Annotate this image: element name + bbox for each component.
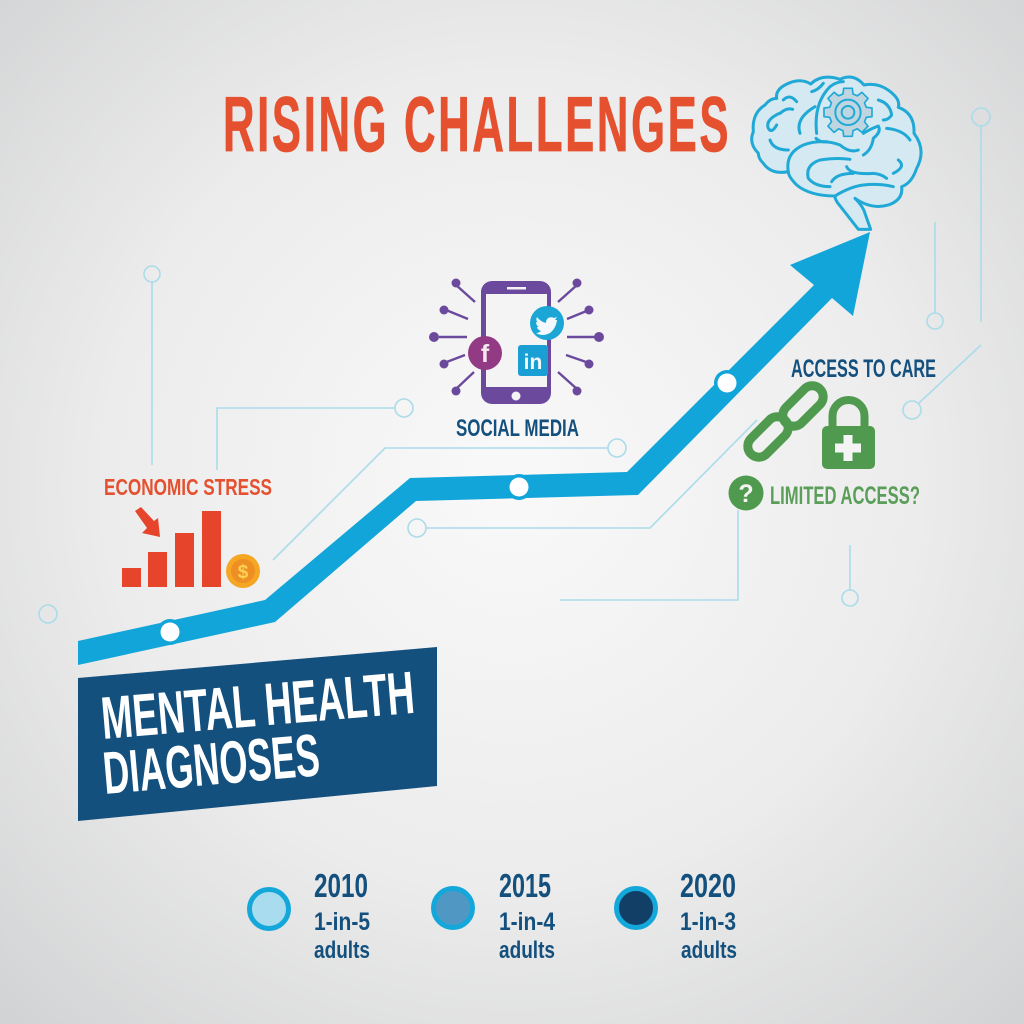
banner: mental health diagnoses: MENTAL HEALTH [98,659,417,752]
legend: 2015 [434,867,555,964]
legend: 2010: 1-in-5 [314,908,370,936]
panel: social media: SOCIAL MEDIA [456,415,579,442]
panel: economic stress [104,474,272,588]
legend: 2015: 1-in-4 [499,908,555,936]
panel: economic stress: ECONOMIC STRESS [104,474,272,500]
legend: 2010 [250,867,370,964]
panel: access to care [728,355,936,510]
icon: facebook: f [481,340,490,368]
legend: 2020: adults [681,937,737,964]
title: RISING CHALLENGES [223,82,731,168]
legend: 2010: 2010 [314,867,368,904]
icon: linkedin [518,345,548,376]
legend: 2010: adults [314,937,370,964]
icon: padlock with cross [822,400,875,469]
icon: red arrow [135,507,160,537]
icon: chain links [743,381,828,462]
icon: dollar coin: $ [238,562,249,583]
icon: question badge [728,476,764,510]
legend: 2015: adults [499,937,555,964]
legend: 2020 [616,867,737,964]
icon: dollar coin [226,554,260,588]
panel: access to care: LIMITED ACCESS? [770,482,920,510]
icon: question badge: ? [738,480,754,508]
legend: 2020: 1-in-3 [680,908,736,936]
icon: radiating nodes [429,278,604,396]
icon: linkedin: in [524,351,542,374]
icon: facebook [468,336,502,370]
rising trend arrow [78,232,870,665]
banner: mental health diagnoses: DIAGNOSES [100,721,322,807]
legend: 2020: 2020 [680,867,736,904]
banner: mental health diagnoses [78,647,437,821]
panel: social media [429,278,604,442]
panel: access to care: ACCESS TO CARE [791,355,936,383]
legend: 2015: 2015 [499,867,551,904]
icon: red bars [122,511,221,587]
icon: brain with gear [752,77,921,229]
icon: twitter [530,306,564,340]
icon: phone [481,281,551,404]
